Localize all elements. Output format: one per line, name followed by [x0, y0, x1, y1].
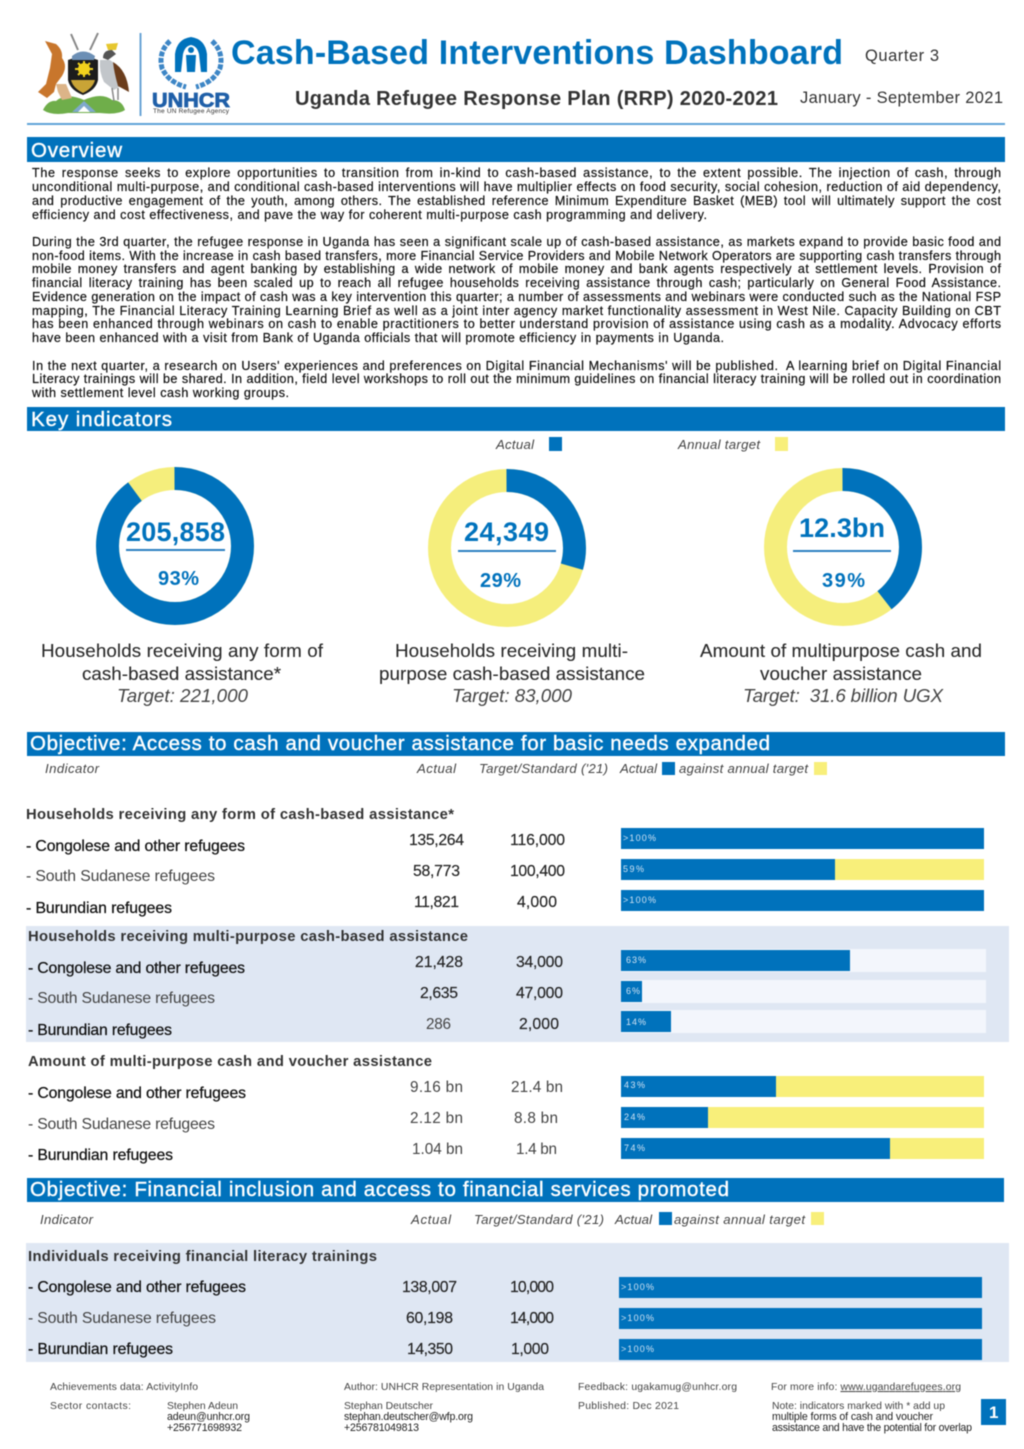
footer: +256771698932	[167, 1422, 242, 1434]
caption: Households receiving multi-	[395, 640, 628, 661]
heading: objective financial inclusion: Objective: Financial inclusion and access to financial services promoted	[30, 1178, 729, 1201]
chart: donut 93%	[108, 478, 242, 614]
date range: January - September 2021	[800, 89, 1003, 107]
chart: donut 29%: 29%	[480, 570, 521, 592]
heading: overview: Overview	[31, 139, 122, 162]
table group: any form of cash-based assistance: 116,000	[510, 832, 565, 849]
table group: multi-purpose cash-based assistance	[26, 926, 1009, 1042]
text block: overview: efficiency and cost effectiveness, and pave the way for coherent multi-purpose cash programming and delivery.	[32, 208, 707, 222]
chart: donut 29%	[440, 480, 574, 616]
bar chart: multi-purpose: 14%	[626, 1017, 646, 1027]
legend: key indicators: Annual target	[677, 437, 761, 452]
table header: basic needs	[45, 761, 827, 776]
table group: financial literacy trainings: - South Sudanese refugees	[28, 1310, 216, 1327]
footer: Sector contacts:	[50, 1401, 131, 1412]
text block: overview: have been enhanced with a visit from Bank of Uganda officials that will promote efficiency in payments in Uganda.	[32, 331, 724, 345]
bar chart: financial literacy	[619, 1277, 982, 1360]
table group: multi-purpose cash-based assistance: - South Sudanese refugees	[28, 990, 215, 1007]
footer: stephan.deutscher@wfp.org	[344, 1411, 473, 1423]
table group: financial literacy trainings	[26, 1243, 1009, 1362]
table group: financial literacy trainings: 60,198	[406, 1310, 453, 1327]
bar chart: financial literacy: >100%	[621, 1313, 654, 1323]
panel: indicator amount of cash	[700, 480, 982, 706]
text block: overview: with settlement level cash working groups.	[31, 386, 289, 400]
caption	[379, 640, 645, 706]
table group: financial literacy trainings: - Burundian refugees	[28, 1341, 173, 1358]
caption: Households receiving any form of	[41, 640, 324, 661]
footer: Stephan Deutscher	[344, 1401, 434, 1412]
caption: voucher assistance	[760, 663, 922, 684]
table header: financial inclusion: Indicator	[40, 1212, 94, 1227]
table header: financial inclusion	[40, 1212, 824, 1227]
table group: any form of cash-based assistance: 135,264	[409, 832, 464, 849]
heading: overview	[27, 137, 1005, 162]
table group: any form of cash-based assistance: - South Sudanese refugees	[26, 868, 215, 885]
table header: financial inclusion: Actual	[614, 1212, 653, 1227]
legend: key indicators	[495, 437, 788, 452]
table group: any form of cash-based assistance: 11,821	[414, 894, 459, 911]
chart: donut 39%: 39%	[822, 570, 865, 592]
quarter label: Quarter 3	[865, 47, 939, 65]
icon: UNHCR logo: UNHCR	[152, 90, 231, 112]
table group: multi-purpose cash-based assistance: 47,000	[516, 985, 563, 1002]
table group: multi-purpose cash-based assistance: 286	[426, 1016, 451, 1033]
table header: basic needs: Indicator	[45, 761, 100, 776]
text block: overview: Literacy trainings will be shared. In addition, field level workshops to roll out the minimum guidelines on financial literacy training will be rolled out in coordination	[32, 372, 1001, 386]
bar chart: any form: 59%	[623, 864, 644, 874]
divider: header rule	[27, 123, 1005, 125]
table group: amount of multi-purpose cash: - South Sudanese refugees	[28, 1116, 215, 1133]
table header: basic needs: Target/Standard ('21)	[479, 761, 608, 776]
heading: key indicators: Key indicators	[31, 408, 172, 431]
footer: multiple forms of cash and voucher	[772, 1411, 933, 1423]
header	[38, 33, 1003, 116]
table group: multi-purpose cash-based assistance: - Burundian refugees	[28, 1022, 172, 1039]
chart: donut 93%: 205,858	[126, 517, 225, 547]
table group: amount of multi-purpose cash: - Congolese and other refugees	[28, 1085, 246, 1102]
text block: overview: The response seeks to explore opportunities to transition from in-kind to cash-based assistance, to the extent possible. The injection of cash, through	[32, 166, 1001, 180]
footer: Achievements data: ActivityInfo	[50, 1382, 198, 1393]
table group: amount of multi-purpose cash	[28, 1054, 984, 1164]
text block: overview: non-food items. With the increase in cash based transfers, more Financial Service Providers and Mobile Network Operators are supporting cash transfers through	[32, 249, 1001, 263]
table group: multi-purpose cash-based assistance: 34,000	[516, 954, 563, 971]
footer: Author: UNHCR Representation in Uganda	[344, 1382, 544, 1393]
caption: Target: 221,000	[117, 685, 249, 706]
text block: overview: In the next quarter, a research on Users' experiences and preferences on Digital Financial Mechanisms' will be published. A learning brief on Digital Financial	[32, 359, 1001, 373]
table group: financial literacy trainings: 14,350	[407, 1341, 453, 1358]
bar chart: amount: 43%	[624, 1080, 645, 1090]
icon: UNHCR logo: The UN Refugee Agency	[153, 108, 230, 115]
caption: Target: 31.6 billion UGX	[743, 685, 944, 706]
footer: For more info: www.ugandarefugees.org	[771, 1382, 961, 1393]
page number	[981, 1399, 1006, 1425]
bar chart: amount: 24%	[624, 1112, 645, 1122]
heading: objective financial inclusion	[27, 1178, 1004, 1202]
bar chart: any form	[621, 828, 984, 911]
footer: Stephen Adeun	[167, 1401, 238, 1412]
table group: any form of cash-based assistance: 4,000	[517, 894, 557, 911]
table header: basic needs: against annual target	[679, 761, 809, 776]
bar chart: any form: >100%	[623, 895, 656, 905]
table group: amount of multi-purpose cash: - Burundian refugees	[28, 1147, 173, 1164]
page number: 1	[989, 1403, 998, 1422]
caption: Amount of multipurpose cash and	[700, 640, 982, 661]
text block: overview: During the 3rd quarter, the refugee response in Uganda has seen a significant scale up of cash-based assistance, as markets expand to provide basic food and	[32, 235, 1001, 249]
title: Cash-Based Interventions Dashboard	[231, 34, 843, 72]
subtitle: Uganda Refugee Response Plan (RRP) 2020-2021	[295, 88, 778, 110]
table group: amount of multi-purpose cash: 9.16 bn	[410, 1079, 463, 1096]
table group: amount of multi-purpose cash: Amount of multi-purpose cash and voucher assistance	[28, 1054, 432, 1070]
table group: multi-purpose cash-based assistance: - Congolese and other refugees	[28, 960, 245, 977]
table group: multi-purpose cash-based assistance: 2,000	[519, 1016, 559, 1033]
table group: any form of cash-based assistance: - Congolese and other refugees	[26, 838, 245, 855]
text block: overview	[31, 166, 1002, 400]
caption: purpose cash-based assistance	[379, 663, 645, 684]
caption	[41, 640, 324, 706]
chart: donut 39%: 12.3bn	[799, 513, 885, 543]
table group: financial literacy trainings: 10,000	[510, 1279, 554, 1296]
table group: financial literacy trainings: 138,007	[402, 1279, 457, 1296]
table group: any form of cash-based assistance	[26, 807, 984, 917]
bar chart: financial literacy: >100%	[621, 1344, 654, 1354]
table group: financial literacy trainings: 14,000	[510, 1310, 554, 1327]
caption: Target: 83,000	[452, 685, 573, 706]
table header: basic needs: Actual	[619, 761, 658, 776]
footer: assistance and have the potential for overlap	[772, 1422, 972, 1434]
icon: UNHCR logo	[152, 37, 231, 115]
chart: donut 39%	[776, 480, 910, 614]
table group: amount of multi-purpose cash: 2.12 bn	[410, 1110, 463, 1127]
table group: any form of cash-based assistance: - Burundian refugees	[26, 900, 172, 917]
caption: cash-based assistance*	[82, 663, 282, 684]
text block: overview: has been enhanced through webinars on cash to enable practitioners to better understand provision of assistance using cash as a modality. Advocacy efforts	[32, 317, 1001, 331]
chart: donut 29%: 24,349	[464, 517, 549, 547]
table group: multi-purpose cash-based assistance: 2,635	[420, 985, 458, 1002]
bar chart: financial literacy: >100%	[621, 1282, 654, 1292]
table group: any form of cash-based assistance: 100,400	[510, 863, 565, 880]
table header: financial inclusion: against annual target	[674, 1212, 806, 1227]
legend: key indicators: Actual	[495, 437, 535, 452]
text block: overview: and productive engagement of the youth, among others. The established reference Minimum Expenditure Basket (MEB) tool will ultimately support the cost	[32, 194, 1001, 208]
table group: financial literacy trainings: 1,000	[511, 1341, 549, 1358]
bar chart: multi-purpose: 6%	[626, 986, 640, 996]
text block: overview: unconditional multi-purpose, and conditional cash-based interventions will have multiplier effects on food security, social cohesion, reduction of aid dependency,	[32, 180, 1001, 194]
table group: amount of multi-purpose cash: 1.04 bn	[412, 1141, 463, 1158]
table group: multi-purpose cash-based assistance: Households receiving multi-purpose cash-based assistance	[28, 929, 468, 945]
icon: Uganda coat of arms	[38, 33, 129, 114]
table group: financial literacy trainings: - Congolese and other refugees	[28, 1279, 246, 1296]
footer	[50, 1382, 972, 1434]
bar chart: multi-purpose	[621, 949, 986, 1033]
caption	[700, 640, 982, 706]
bar chart: amount: 74%	[624, 1143, 645, 1153]
bar chart: any form: >100%	[623, 833, 656, 843]
footer: +256781049813	[344, 1422, 419, 1434]
footer: Feedback: ugakamug@unhcr.org	[578, 1382, 737, 1393]
heading: objective basic needs: Objective: Access to cash and voucher assistance for basic needs expanded	[30, 732, 770, 755]
table group: any form of cash-based assistance: 58,773	[413, 863, 460, 880]
footer: adeun@unhcr.org	[167, 1411, 250, 1423]
bar chart: multi-purpose: 63%	[626, 955, 646, 965]
chart: donut 93%: 93%	[158, 568, 199, 590]
panel: indicator households multi-purpose	[379, 480, 645, 706]
table group: amount of multi-purpose cash: 1.4 bn	[516, 1141, 557, 1158]
text block: overview: mapping, The Financial Literacy Training Learning Brief as well as a joint inter agency market functionality assessment in West Nile. Capacity Building on CBT	[32, 304, 1001, 318]
table header: financial inclusion: Target/Standard ('21)	[474, 1212, 604, 1227]
table group: any form of cash-based assistance: Households receiving any form of cash-based assistance*	[26, 807, 454, 823]
table group: financial literacy trainings: Individuals receiving financial literacy trainings	[28, 1249, 377, 1265]
footer: Note: indicators marked with * add up	[772, 1401, 945, 1412]
bar chart: amount	[621, 1076, 984, 1159]
table header: basic needs: Actual	[416, 761, 457, 776]
text block: overview: Evidence generation on the impact of cash was a key intervention this quarter; a number of assessments and webinars were conducted such as the National FSP	[32, 290, 1001, 304]
text block: overview: mobile money transfers and agent banking by establishing a wide network of mobile money and bank agents respectively at settlement levels. Provision of	[32, 262, 1002, 276]
panel: indicator households any cash	[41, 478, 324, 706]
table header: financial inclusion: Actual	[410, 1212, 452, 1227]
table group: amount of multi-purpose cash: 8.8 bn	[514, 1110, 558, 1127]
heading: key indicators	[27, 407, 1005, 431]
table group: amount of multi-purpose cash: 21.4 bn	[511, 1079, 563, 1096]
divider: header vertical rule	[140, 33, 142, 116]
text block: overview: financial literacy training has been scaled up to reach all refugee households receiving assistance through cash; particularly on General Food Assistance.	[32, 276, 1001, 290]
table group: multi-purpose cash-based assistance: 21,428	[415, 954, 463, 971]
footer: Published: Dec 2021	[578, 1401, 679, 1412]
